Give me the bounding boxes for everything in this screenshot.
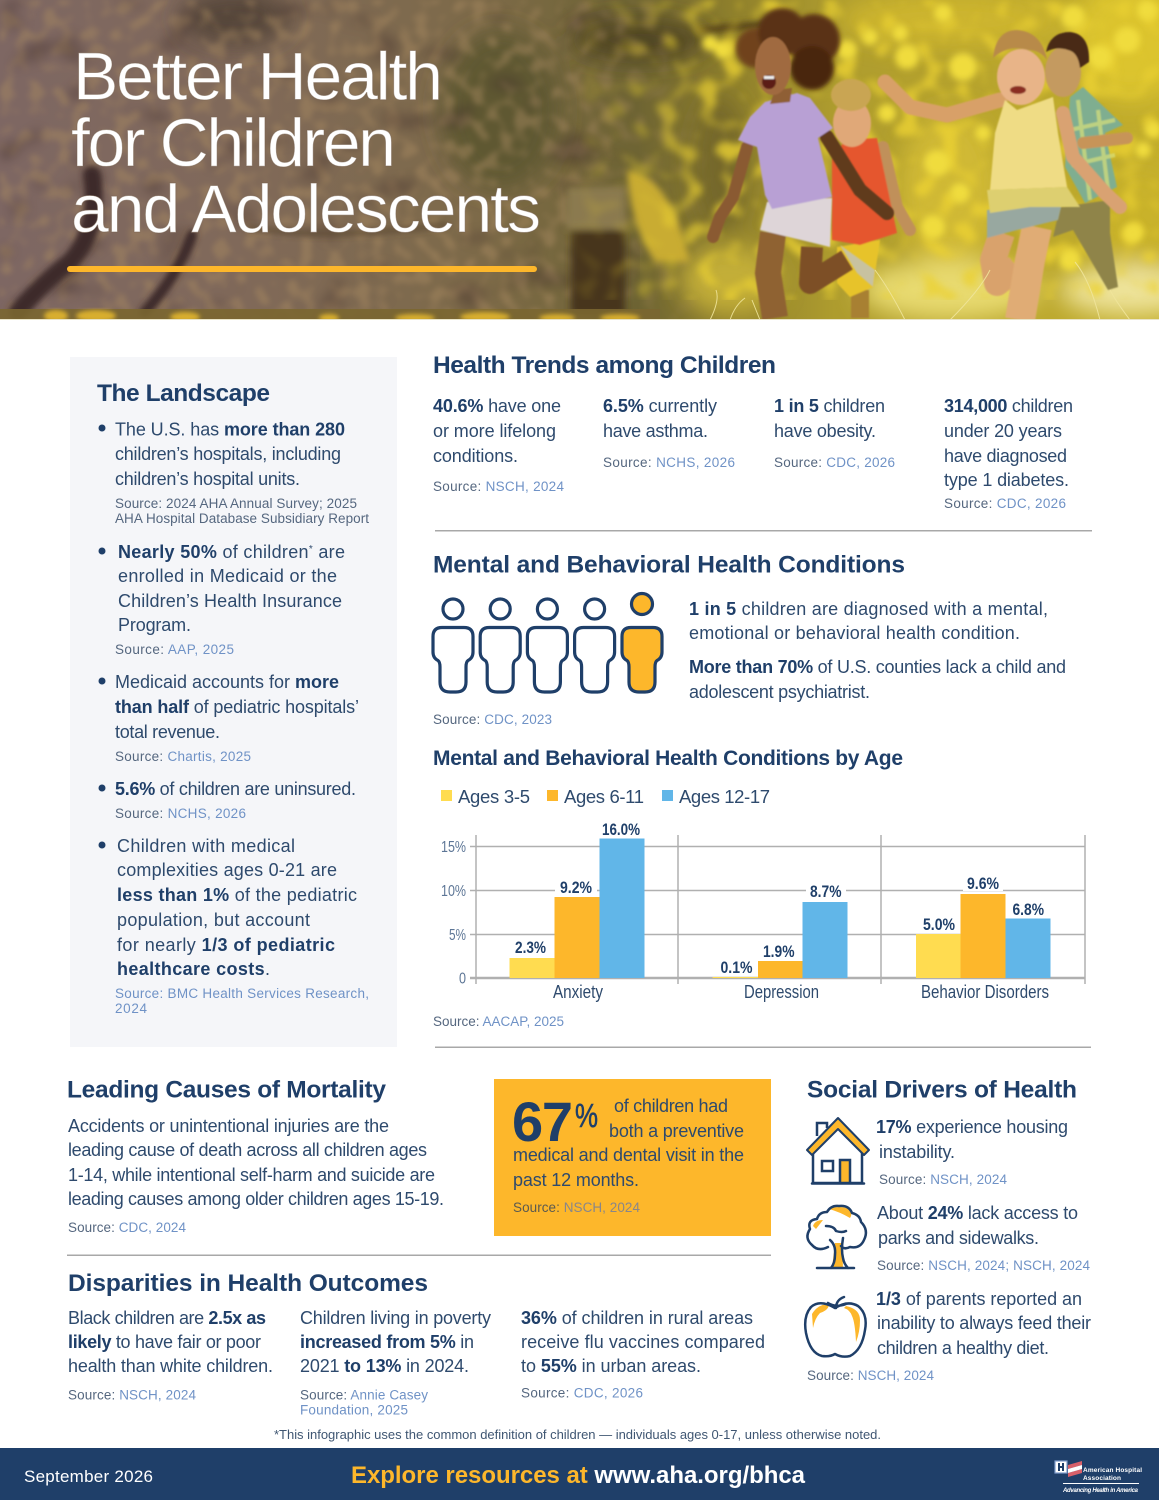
value labels: 9.6% [967,874,999,893]
footnote: *This infographic uses the common definition of children — individuals ages 0-17, unless otherwise noted. [274,1427,881,1442]
statement: diagnosis rate and psychiatrists: adolescent psychiatrist. [689,682,870,702]
stat: diabetes: Source: CDC, 2026 [944,496,1066,511]
stat: obesity: Source: CDC, 2026 [774,455,895,470]
callout: 67 percent: of children had [614,1096,728,1116]
legend: Ages 12-17 [679,786,770,807]
bars: Anxiety [510,838,644,978]
bullet: medical complexities: healthcare costs. [117,959,270,979]
stat: diabetes [944,396,1073,511]
stat: race: likely to have fair or poor [68,1332,261,1352]
bullet: medical complexities: Source: BMC Health Services Research, [115,986,369,1001]
bullet: children's hospitals: Source: 2024 AHA Annual Survey; 2025 [115,496,357,511]
stat: obesity [774,396,895,470]
stat: obesity: have obesity. [774,421,876,441]
callout: 67 percent [494,1079,771,1236]
axis labels: 10% [441,883,466,900]
value labels [512,820,1048,977]
girl in purple shirt [713,8,887,318]
stat: poverty: Children living in poverty [300,1308,491,1328]
stat: parks: Source: NSCH, 2024; NSCH, 2024 [877,1258,1090,1273]
heading: Disparities: Disparities in Health Outcomes [68,1270,428,1297]
boy in plaid shirt [1045,32,1127,290]
stat: diabetes: type 1 diabetes. [944,470,1069,490]
value labels: 16.0% [602,820,640,839]
stat: food [807,1289,1091,1383]
value labels: 2.3% [515,938,546,957]
bullet: children's hospitals [98,420,369,526]
statement: diagnosis rate and psychiatrists: 1 in 5 children are diagnosed with a mental, [689,599,1048,619]
stat: lifelong conditions: 40.6% have one [433,396,561,416]
callout: 67 percent: past 12 months. [513,1170,639,1190]
axis labels: 15% [441,839,466,856]
legend: Ages 6-11 [564,786,644,807]
stat: lifelong conditions: or more lifelong [433,421,556,441]
heading: Health Trends: Health Trends among Children [433,352,776,379]
stat: rural vaccines [521,1308,765,1400]
heading: Leading Causes of Mortality: Leading Causes of Mortality [67,1076,386,1104]
icon: apple [805,1297,866,1357]
axis labels [441,839,466,988]
stat: asthma: have asthma. [603,421,708,441]
bullet: Medicaid enrollment: are [313,542,345,562]
stat: poverty [300,1308,491,1418]
stat: asthma [603,396,735,470]
stat: housing: instability. [879,1142,955,1162]
section: Disparities in Health Outcomes [68,1270,765,1418]
icon: five people, one highlighted [433,594,662,692]
statement: diagnosis rate and psychiatrists [689,599,1066,702]
callout: 67 percent: medical and dental visit in the [513,1145,744,1165]
logo: American Hospital Association [1055,1461,1142,1494]
heading: The Landscape: The Landscape [97,380,270,407]
stat: lifelong conditions [433,396,564,494]
footer bar [0,1448,1159,1500]
bullet: Medicaid enrollment: Program. [118,615,191,635]
value labels: 9.2% [560,878,592,897]
text block: mortality: 1-14, while intentional self-harm and suicide are [68,1165,435,1185]
bullet: Medicaid enrollment: * [309,544,313,555]
stat: food: children a healthy diet. [877,1338,1049,1358]
stat: diabetes: 314,000 children [944,396,1073,416]
bullet: medical complexities: population, but account [117,910,310,930]
bullet: children's hospitals: children’s hospital units. [115,469,300,489]
text block: mortality: Accidents or unintentional injuries are the [68,1116,389,1136]
bullet: children's hospitals: The U.S. has more than 280 [115,420,345,440]
stat: diabetes: have diagnosed [944,446,1067,466]
legend: Ages 3-5 [458,786,530,807]
bullet: Medicaid revenue: than half of pediatric hospitals’ [115,697,359,717]
stat: lifelong conditions: conditions. [433,446,518,466]
stat: poverty: 2021 to 13% in 2024. [300,1356,469,1376]
source: AACAP 2025: Source: AACAP, 2025 [433,1014,564,1029]
stat: food: Source: NSCH, 2024 [807,1368,934,1383]
bullet: Medicaid enrollment: enrolled in Medicaid or the [118,566,337,586]
stat: housing: Source: NSCH, 2024 [879,1172,1007,1187]
stat: housing [876,1117,1068,1187]
text block: mortality: Source: CDC, 2024 [68,1220,186,1235]
callout: 67 percent: Source: NSCH, 2024 [513,1200,640,1215]
title: for Children [71,105,396,181]
value labels: 5.0% [923,915,955,934]
stat: asthma: 6.5% currently [603,396,717,416]
bullet: medical complexities: for nearly 1/3 of pediatric [117,935,335,955]
axis labels: 5% [449,927,466,944]
footer call to action: Explore resources at www.aha.org/bhca [351,1462,806,1489]
legend [441,786,770,807]
stat: parks [877,1203,1090,1273]
stat: diabetes: under 20 years [944,421,1062,441]
stat: housing: 17% experience housing [876,1117,1068,1137]
bullet: children's hospitals: AHA Hospital Database Subsidiary Report [115,511,369,526]
value labels: 6.8% [1012,900,1044,919]
grass along the bottom [710,262,1130,320]
category labels: Behavior Disorders [921,982,1049,1002]
bullet: medical complexities: complexities ages 0-21 are [117,860,337,880]
bullet: uninsured: 5.6% of children are uninsured. [115,779,356,799]
stat: race: health than white children. [68,1356,273,1376]
bars: Behavior Disorders [916,894,1050,978]
bullet: Medicaid enrollment [98,542,345,657]
value labels: 0.1% [720,958,752,977]
icon: tree [807,1206,866,1268]
logo: American Hospital Association: Advancing Health in America [1062,1488,1139,1494]
stat: poverty: Foundation, 2025 [300,1402,408,1418]
bullet: medical complexities: less than 1% of the pediatric [117,885,357,905]
hero photo: children running through a sunlit park [0,0,1159,322]
callout: 67 percent: 67 [512,1090,573,1153]
stat: parks: About 24% lack access to [877,1203,1078,1223]
stat: rural vaccines: to 55% in urban areas. [521,1356,701,1376]
section: Health Trends among Children [433,352,1073,511]
logo: American Hospital Association: American Hospital [1083,1467,1142,1474]
bullet: Medicaid enrollment: Children’s Health Insurance [118,591,342,611]
heading: Mental and Behavioral Health Conditions: Mental and Behavioral Health Conditions [433,552,905,578]
source: CDC 2023: Source: CDC, 2023 [433,712,552,727]
bars: Depression [712,902,848,978]
bullet: medical complexities: 2024 [115,1001,147,1016]
bullet: medical complexities: Children with medical [117,836,295,856]
sunlit strip along the bottom [0,309,646,319]
bar chart: conditions by age [441,820,1085,1002]
stat: rural vaccines: receive flu vaccines compared [521,1332,765,1352]
footer date: September 2026 [24,1467,153,1486]
heading: Social Drivers: Social Drivers of Health [807,1076,1077,1104]
stat: parks: parks and sidewalks. [878,1228,1039,1248]
stat: race [68,1308,273,1402]
bullet: Medicaid revenue: Medicaid accounts for more [115,672,339,692]
statement: diagnosis rate and psychiatrists: More than 70% of U.S. counties lack a child and [689,657,1066,677]
heading: conditions by age: Mental and Behavioral Health Conditions by Age [433,747,903,770]
logo: American Hospital Association: Association [1083,1475,1121,1482]
girl in yellow top [885,30,1120,320]
stat: obesity: 1 in 5 children [774,396,885,416]
bullet: children's hospitals: children’s hospitals, including [115,444,341,464]
stat: lifelong conditions: Source: NSCH, 2024 [433,479,564,494]
stat: poverty: increased from 5% in [300,1332,474,1352]
bullet: uninsured: Source: NCHS, 2026 [115,806,246,821]
stat: food: 1/3 of parents reported an [876,1289,1082,1309]
stat: rural vaccines: Source: CDC, 2026 [521,1386,643,1400]
value labels: 1.9% [763,942,794,961]
stat: food: inability to always feed their [877,1313,1091,1333]
title: Better Health [73,38,443,114]
statement: diagnosis rate and psychiatrists: emotional or behavioral health condition. [689,623,1020,643]
icon: house [807,1118,869,1184]
value labels: 8.7% [810,882,842,901]
bullet: medical complexities [98,836,369,1016]
callout: 67 percent: both a preventive [609,1121,744,1141]
category labels: Anxiety [553,982,603,1002]
bullet: uninsured [98,779,356,821]
title [71,38,541,247]
section: Social Drivers of Health [805,1076,1091,1383]
stat: poverty: Source: Annie Casey [300,1388,428,1402]
bullet: Medicaid enrollment: Source: AAP, 2025 [115,642,234,657]
axis labels: 0 [459,970,466,988]
category labels: Depression [744,982,819,1002]
text block: mortality: leading causes among older children ages 15-19. [68,1189,444,1209]
bullet: Medicaid revenue [98,672,359,764]
title: and Adolescents [71,171,541,247]
title underline [67,266,537,272]
bullet: Medicaid revenue: total revenue. [115,722,220,742]
bullet: Medicaid enrollment: Nearly 50% of children [118,542,309,562]
bullet: Medicaid revenue: Source: Chartis, 2025 [115,749,251,764]
section: Leading Causes of Mortality [67,1076,444,1235]
stat: race: Source: NSCH, 2024 [68,1388,196,1402]
stat: race: Black children are 2.5x as [68,1308,266,1328]
category labels [553,982,1049,1002]
text block: mortality [68,1116,444,1235]
callout: 67 percent: % [575,1097,598,1134]
stat: rural vaccines: 36% of children in rural areas [521,1308,753,1328]
girl in red dress [831,79,910,318]
panel: The Landscape [70,357,397,1047]
section: Mental and Behavioral Health Conditions [433,552,1066,727]
text block: mortality: leading cause of death across all children ages [68,1140,427,1160]
stat: asthma: Source: NCHS, 2026 [603,455,735,470]
